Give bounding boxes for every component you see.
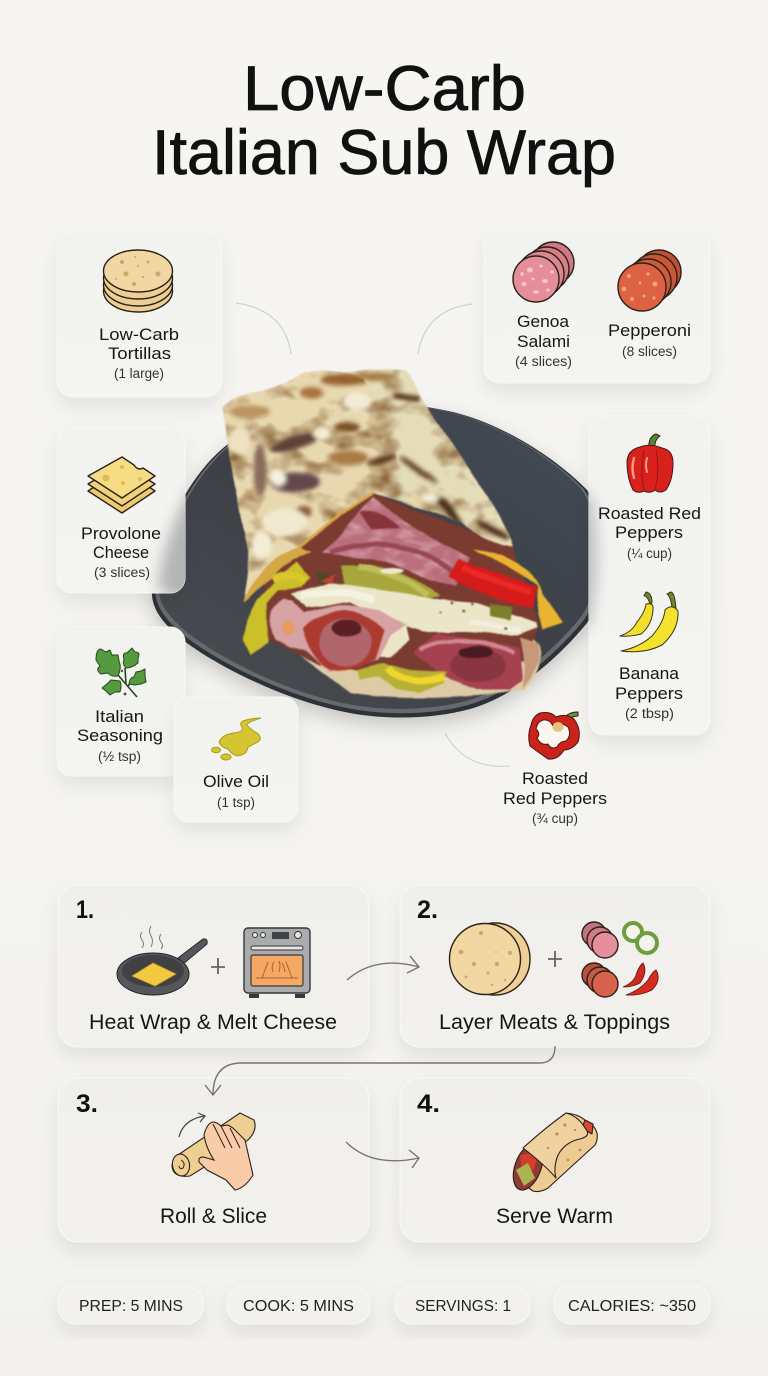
right tortilla edge [520,637,540,690]
label: Salami [517,332,570,351]
panel: step 1 [58,885,369,1047]
arrow: step 3 to 4 [346,1142,419,1168]
step number: 2. [417,896,438,924]
label: Seasoning [77,726,163,745]
panel: red and banana peppers [587,434,712,746]
bottom tortilla [255,610,542,698]
label [81,524,161,580]
back flap [340,369,513,547]
front flap [223,371,397,603]
caption: Serve Warm [496,1205,613,1228]
green pepper [340,564,441,600]
panel: provolone cheese [55,452,187,604]
icon: cheese slices [88,457,155,513]
caption: Roll & Slice [160,1205,267,1228]
icon: pepperoni slices [582,963,618,997]
golden under-edge of flap [243,547,312,603]
label: (4 slices) [515,354,572,369]
label: Red Peppers [503,789,607,808]
label [515,312,691,369]
label: Cheese [93,543,149,562]
title: Low-Carb [243,54,526,124]
label: (8 slices) [622,344,677,359]
label: (2 tbsp) [625,706,674,721]
pill: cook: COOK: 5 MINS [243,1298,354,1315]
icon: pepperoni [618,250,681,311]
bottom yellow pepper [357,663,447,693]
icon: served wrap [508,1113,597,1194]
caption: Layer Meats & Toppings [439,1011,670,1034]
label [77,707,163,764]
icon: genoa salami [513,242,574,302]
label: Low-Carb [99,325,179,344]
label: Provolone [81,524,161,543]
icon: parsley [96,648,146,697]
caption: Heat Wrap & Melt Cheese [89,1011,337,1034]
roasted red peppers callout [503,712,607,826]
label: Tortillas [108,344,171,363]
panel: step 2 [400,885,710,1047]
icon: salami slices [582,922,618,958]
label [503,769,607,826]
connector: meats to wrap [418,304,472,354]
label: Peppers [615,523,683,542]
label: Italian [95,707,144,726]
yellow strips right [473,549,563,630]
label: Pepperoni [608,321,691,340]
melted cheese [290,583,538,657]
icon: sliced red pepper [529,712,579,759]
icon: pan with cheese [117,926,207,995]
panel: low-carb tortillas [57,232,222,397]
label [203,772,269,810]
lower right meat curl [413,633,523,690]
golden flap edge [300,493,373,547]
panel: step 4 [400,1078,710,1242]
icon: red bell pepper [627,434,673,492]
connector: roasted peppers to wrap [445,733,510,766]
pill: calories: CALORIES: ~350 [568,1298,696,1315]
arrow: step 2 to 3 [205,1046,555,1095]
icon: green pepper rings [624,923,657,953]
icon: oil puddle [212,718,261,760]
icon: oven [244,928,310,998]
pill: servings: SERVINGS: 1 [415,1298,511,1315]
lower left meat curl [271,598,407,672]
icon: banana peppers [620,592,678,652]
label: Roasted Red [598,504,701,523]
icon: hand rolling wrap [171,1113,255,1190]
label: (¼ cup) [627,546,672,561]
label: Genoa [517,312,570,331]
plus [211,958,225,974]
title [152,54,616,188]
panel: olive oil [174,697,298,822]
label: (3 slices) [94,565,150,580]
filling background [262,493,540,680]
top salami [322,497,470,587]
panel: salami and pepperoni [484,230,710,383]
left yellow pepper [243,562,310,655]
label: Olive Oil [203,772,269,791]
panel: italian seasoning [57,627,185,776]
step number: 1. [76,896,94,924]
pill: prep: PREP: 5 MINS [79,1298,183,1315]
pill: servings [395,1286,530,1324]
arrow: step 1 to 2 [347,956,419,980]
label: (¾ cup) [532,811,578,826]
char on back flap [352,369,512,542]
plus [548,951,562,967]
label: (1 tsp) [217,795,255,810]
plate [152,404,605,718]
red pepper strip [448,559,536,609]
char on front flap [220,365,400,605]
small green bits [490,604,512,620]
panel: step 3 [58,1078,369,1242]
wrap photo illustration [220,365,563,698]
icon: chili peppers [623,963,658,995]
icon: tortillas [450,923,530,995]
title: Italian Sub Wrap [152,118,616,188]
label: (½ tsp) [98,749,141,764]
step number: 3. [76,1090,98,1118]
label: Roasted [522,769,588,788]
label: (1 large) [114,366,164,381]
label: Banana [619,664,680,683]
label [598,504,701,721]
pill: cook [227,1286,370,1324]
pill: prep [58,1286,203,1324]
label [99,325,179,381]
connector: tortillas to wrap [236,303,291,354]
pill: calories [554,1286,710,1324]
icon: tortilla stack [104,250,172,312]
label: Peppers [615,684,683,703]
step number: 4. [417,1090,440,1118]
